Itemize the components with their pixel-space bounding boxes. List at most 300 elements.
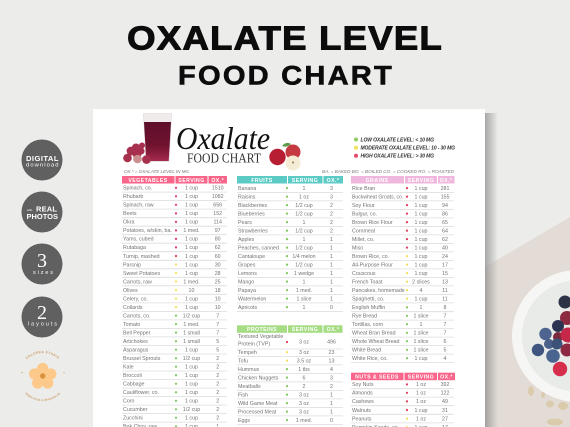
vegetables rows: 2 xyxy=(216,356,219,362)
logo: flower studio: COLOREA STUDIO xyxy=(26,350,60,359)
grains rows: 1 xyxy=(420,305,423,311)
photo: oatmeal bowl with berries xyxy=(512,270,570,426)
vegetables rows: 97 xyxy=(215,228,221,234)
nuts rows: 1 oz xyxy=(416,382,426,388)
vegetables header xyxy=(122,176,227,184)
grains rows: Couscous xyxy=(352,271,376,277)
nuts rows: 392 xyxy=(441,382,449,388)
fruits rows: 2 xyxy=(330,220,333,226)
vegetables rows: 1 small xyxy=(183,339,200,345)
grains rows: 1 slice xyxy=(413,331,429,337)
fruits rows: Blackberries xyxy=(238,203,267,209)
fruits rows: 1/2 cup xyxy=(295,245,313,251)
vegetables rows: Cabbage xyxy=(123,382,145,388)
vegetables rows: 1082 xyxy=(212,194,224,200)
vegetables rows: Rutabaga xyxy=(123,245,146,251)
vegetables rows: 1510 xyxy=(212,186,224,192)
badge: 2 layouts: 2 xyxy=(37,302,47,324)
nuts rows: Soy Nuts xyxy=(352,382,374,388)
proteins rows: Chicken Nuggets xyxy=(238,375,279,381)
vegetables rows: Asparagus xyxy=(123,348,149,354)
grains rows: 1 cup xyxy=(415,356,428,362)
grains rows: 65 xyxy=(442,220,448,226)
grains rows: Whole Wheat Bread xyxy=(352,339,399,345)
nuts rows: 1 oz xyxy=(416,391,426,397)
fruits rows: Apricots xyxy=(238,305,257,311)
grains rows: English Muffin xyxy=(352,305,385,311)
nuts rows: 1 oz xyxy=(416,399,426,405)
proteins rows: Fish xyxy=(238,392,248,398)
panel: vegetables xyxy=(122,176,227,427)
vegetables rows: 60 xyxy=(215,254,221,260)
vegetables rows: 1 cup xyxy=(185,211,198,217)
vegetables rows: 10 xyxy=(215,296,221,302)
fruits rows: 1 xyxy=(330,279,333,285)
vegetables rows: 7 xyxy=(216,322,219,328)
vegetables rows: Yams, cubed xyxy=(123,237,154,243)
vegetables rows: 2 xyxy=(216,416,219,422)
proteins rows: 1 xyxy=(330,409,333,415)
grains rows: 64 xyxy=(442,228,448,234)
vegetables rows: 2 xyxy=(216,373,219,379)
proteins rows: Hummus xyxy=(238,367,260,373)
grains rows: 7 xyxy=(444,331,447,337)
heading: Oxalate: Oxalate xyxy=(176,120,270,156)
fruits header: OX.* xyxy=(327,178,340,184)
vegetables rows: Collards xyxy=(123,305,143,311)
panel: fruits xyxy=(237,176,343,311)
grains rows: Cornmeal xyxy=(352,228,375,234)
vegetables rows: Sweet Potatoes xyxy=(123,271,160,277)
grains rows: Rye Bread xyxy=(352,314,377,320)
fruits rows: 3 xyxy=(330,186,333,192)
grains rows: 1 cup xyxy=(415,237,428,243)
nuts rows: 31 xyxy=(442,408,448,414)
grains rows: 5 xyxy=(444,348,447,354)
vegetables header: SERVING xyxy=(178,178,205,184)
vegetables rows: Potatoes, w/skin, ba. xyxy=(123,228,172,234)
fruits rows: Mango xyxy=(238,279,254,285)
fruits rows: Banana xyxy=(238,186,256,192)
proteins header: OX.* xyxy=(327,327,340,333)
fruits rows: 1 xyxy=(303,186,306,192)
beige tabletop xyxy=(485,217,570,427)
proteins rows: 3 oz xyxy=(299,392,309,398)
proteins rows: 496 xyxy=(327,340,336,346)
grains rows: Rice Bran xyxy=(352,186,375,192)
vegetables rows: Tomato xyxy=(123,322,140,328)
vegetables rows: 2 xyxy=(216,364,219,370)
vegetables rows: 1 cup xyxy=(185,382,198,388)
vegetables rows: 1 cup xyxy=(185,373,198,379)
vegetables rows: 1 cup xyxy=(185,245,198,251)
vegetables rows: Carrots, co. xyxy=(123,313,150,319)
grains rows: 1 cup xyxy=(415,296,428,302)
badge: real photos: with xyxy=(27,208,33,212)
grains rows: Millet, co. xyxy=(352,237,374,243)
grains rows: Soy Flour xyxy=(352,203,375,209)
grains rows: White Rice, co. xyxy=(352,356,388,362)
panel: nuts and seeds xyxy=(351,373,455,427)
grains rows: 1 cup xyxy=(415,220,428,226)
vegetables rows: Spinach, co. xyxy=(123,186,152,192)
nuts header: NUTS & SEEDS xyxy=(355,374,399,380)
fruits rows xyxy=(237,186,343,311)
vegetables rows: 62 xyxy=(215,245,221,251)
badge: digital download xyxy=(22,140,62,180)
vegetables rows: Cauliflower, co. xyxy=(123,390,159,396)
badge: 3 sizes xyxy=(22,244,62,284)
fruits rows: Lemons xyxy=(238,271,257,277)
vegetables rows: 1 med. xyxy=(183,322,200,328)
badge: real photos xyxy=(22,192,62,232)
grains rows: 7 xyxy=(444,314,447,320)
vegetables rows: Turnip, mashed xyxy=(123,254,160,260)
fruits header: FRUITS xyxy=(251,178,273,184)
grains rows: Spaghetti, co. xyxy=(352,296,384,302)
proteins rows: Textured Vegetable xyxy=(238,334,283,340)
proteins rows: Protein (TVP) xyxy=(238,342,270,348)
vegetables rows: Broccoli xyxy=(123,373,142,379)
vegetables rows: 1 cup xyxy=(185,237,198,243)
vegetables rows: 18 xyxy=(215,288,221,294)
grains rows: 1 cup xyxy=(415,262,428,268)
vegetables rows xyxy=(122,186,227,427)
grains rows: 8 xyxy=(444,305,447,311)
icon: red grapes xyxy=(123,142,151,164)
vegetables header: OX.* xyxy=(211,178,225,184)
fruits rows: 1 med. xyxy=(296,288,312,294)
grains rows: Pancakes, homemade xyxy=(352,288,405,294)
nuts rows: 27 xyxy=(442,416,448,422)
nuts rows: 49 xyxy=(442,399,448,405)
proteins rows: 4 xyxy=(330,367,333,373)
nuts rows: 1 oz xyxy=(416,416,426,422)
proteins rows: 2 xyxy=(303,384,306,390)
proteins rows: 6 xyxy=(303,375,306,381)
vegetables rows: Rhubarb xyxy=(123,194,143,200)
nuts rows: Peanuts xyxy=(352,416,372,422)
vegetables rows: 10 xyxy=(215,305,221,311)
proteins rows: 3 oz xyxy=(299,401,309,407)
badge: real photos: PHOTOS xyxy=(26,212,58,221)
badge: 2 layouts: layouts xyxy=(28,322,57,328)
fruits rows: 1 oz xyxy=(299,194,309,200)
grains rows xyxy=(351,186,454,362)
vegetables rows: 152 xyxy=(213,211,222,217)
grains rows: Brown Rice, co. xyxy=(352,254,389,260)
grains rows: 1 xyxy=(420,322,423,328)
fruits rows: 1/4 melon xyxy=(292,254,316,260)
vegetables rows: Cucumber xyxy=(123,407,148,413)
vegetables rows: Corn xyxy=(123,399,135,405)
fruits rows: 1 xyxy=(330,254,333,260)
fruits rows: Papaya xyxy=(238,288,256,294)
proteins rows: 3 oz xyxy=(299,409,309,415)
grains rows: 1 cup xyxy=(415,194,428,200)
vegetables rows: Spinach, raw xyxy=(123,203,154,209)
grains rows: 1 cup xyxy=(415,186,428,192)
proteins rows xyxy=(237,334,343,424)
fruits rows: 1 xyxy=(330,296,333,302)
proteins rows: 3 oz xyxy=(299,340,309,346)
fruits rows: 2 xyxy=(330,211,333,217)
proteins rows: Processed Meat xyxy=(238,409,277,415)
vegetables rows: Parsnip xyxy=(123,262,141,268)
fruits rows: Cantaloupe xyxy=(238,254,265,260)
nuts rows: Cashews xyxy=(352,399,374,405)
nuts header xyxy=(351,373,455,380)
grains rows: Bulgur, co. xyxy=(352,211,377,217)
title xyxy=(127,20,443,90)
grains rows: 1 cup xyxy=(415,228,428,234)
grains rows: 1 slice xyxy=(413,348,429,354)
fruits rows: 1 slice xyxy=(296,296,312,302)
fruits rows: Watermelon xyxy=(238,296,266,302)
note: cooking abbreviations: BA. = BAKED BO. = BOILED CO. = COOKED RO. = ROASTED xyxy=(322,169,455,174)
grains header: SERVING xyxy=(408,178,434,184)
vegetables rows: 1/2 cup xyxy=(183,356,200,362)
vegetables rows: 1 cup xyxy=(185,254,198,260)
fruits rows: 1 xyxy=(303,237,306,243)
nuts header: OX.* xyxy=(440,374,453,380)
vegetables rows: Artichokes xyxy=(123,339,148,345)
vegetables rows: 114 xyxy=(213,220,222,226)
vegetables rows: 2 xyxy=(216,390,219,396)
grains rows: 7 xyxy=(444,322,447,328)
fruits rows: 1 xyxy=(330,262,333,268)
grains rows: French Toast xyxy=(352,279,383,285)
grains rows: 6 xyxy=(444,339,447,345)
legend: MODERATE OXALATE LEVEL: 10 - 30 MG xyxy=(360,146,455,152)
vegetables rows: 30 xyxy=(215,262,221,268)
proteins rows: 2 xyxy=(330,384,333,390)
proteins rows: Eggs xyxy=(238,418,250,424)
proteins rows: Wild Game Meat xyxy=(238,401,278,407)
proteins rows: 13 xyxy=(329,358,334,364)
grains rows: 2 slices xyxy=(412,279,430,285)
badge: 2 layouts xyxy=(22,296,62,338)
legend: LOW OXALATE LEVEL: < 10 MG xyxy=(360,138,434,144)
fruits rows: Grapes xyxy=(238,262,256,268)
fruits rows: 1/2 cup xyxy=(295,211,313,217)
fruits rows: 1/2 cup xyxy=(295,262,313,268)
fruits rows: 1 xyxy=(330,271,333,277)
subtitle: FOOD CHART xyxy=(178,60,394,90)
grains rows: 1 slice xyxy=(413,339,429,345)
fruits rows: Strawberries xyxy=(238,228,268,234)
logo: flower studio xyxy=(21,350,65,401)
vegetables rows: 1 cup xyxy=(185,399,198,405)
grains rows: 94 xyxy=(442,203,448,209)
legend: HIGH OXALATE LEVEL: > 30 MG xyxy=(360,154,434,160)
vegetables rows: 2 xyxy=(216,382,219,388)
proteins header xyxy=(237,325,342,333)
grains rows: Wheat Bran Bread xyxy=(352,331,396,337)
vegetables rows: 1 cup xyxy=(185,262,198,268)
proteins rows: 1 med. xyxy=(296,418,312,424)
vegetables rows: 7 xyxy=(216,330,219,336)
panel: chart sheet xyxy=(93,109,485,427)
grains rows: 24 xyxy=(442,254,448,260)
fruits rows: 3 xyxy=(330,194,333,200)
grains rows: Miso xyxy=(352,245,363,251)
proteins rows: Tempeh xyxy=(238,350,257,356)
grains rows: 4 xyxy=(444,356,447,362)
vegetables rows: 1 cup xyxy=(185,416,198,422)
fruits rows: 1 xyxy=(330,237,333,243)
fruits rows: 1 wedge xyxy=(294,271,314,277)
fruits header: SERVING xyxy=(292,178,318,184)
nuts rows: Walnuts xyxy=(352,408,371,414)
fruits rows: 0 xyxy=(330,305,333,311)
grains rows: 155 xyxy=(441,194,449,200)
legend xyxy=(354,138,455,160)
proteins header: SERVING xyxy=(292,327,318,333)
nuts rows xyxy=(351,382,454,427)
vegetables rows: 1 cup xyxy=(185,364,198,370)
vegetables rows: 1 med. xyxy=(183,279,200,285)
vegetables rows: 5 xyxy=(216,348,219,354)
grains rows: Buckwheat Groats, co. xyxy=(352,194,403,200)
vegetables rows: 1 med. xyxy=(183,228,200,234)
fruits rows: Peaches, canned xyxy=(238,245,279,251)
vegetables header: VEGETABLES xyxy=(128,178,168,184)
icon: apples xyxy=(269,143,300,170)
grains rows: 1 cup xyxy=(415,203,428,209)
vegetables rows: 2 xyxy=(216,407,219,413)
grains rows: 40 xyxy=(442,245,448,251)
note: ox abbreviation: OX.* = OXALATE LEVEL IN MG xyxy=(124,169,189,174)
grains rows: Tortillas, corn xyxy=(352,322,383,328)
nuts header: SERVING xyxy=(408,374,434,380)
proteins rows: 1 xyxy=(330,392,333,398)
grains header xyxy=(351,176,454,184)
proteins rows: 3 xyxy=(330,375,333,381)
grains rows: 17 xyxy=(442,262,448,268)
heading: food chart: FOOD CHART xyxy=(187,151,262,166)
proteins rows: Meatballs xyxy=(238,384,261,390)
panel: proteins xyxy=(237,325,343,424)
vegetables rows: 7 xyxy=(216,313,219,319)
icon: glass of juice xyxy=(144,114,172,162)
proteins rows: 3.5 oz xyxy=(297,358,312,364)
title: OXALATE LEVEL xyxy=(127,20,443,58)
grains rows: 62 xyxy=(442,237,448,243)
grains rows: 1 cup xyxy=(415,245,428,251)
fruits rows: 1 xyxy=(330,245,333,251)
vegetables rows: Olives xyxy=(123,288,138,294)
vegetables rows: 1 cup xyxy=(185,194,198,200)
vegetables rows: 10 xyxy=(189,288,194,294)
fruits rows: 2 xyxy=(330,228,333,234)
nuts rows: 122 xyxy=(441,391,449,397)
vegetables rows: 1/2 cup xyxy=(183,407,200,413)
grains rows: 1 cup xyxy=(415,211,428,217)
grains rows: 86 xyxy=(442,211,448,217)
badge: digital download: DIGITAL xyxy=(26,154,59,163)
fruits rows: Pears xyxy=(238,220,252,226)
grains rows: All-Purpose Flour xyxy=(352,262,393,268)
vegetables rows: Bell Pepper xyxy=(123,330,151,336)
badge: 3 sizes: sizes xyxy=(33,270,53,276)
fruits rows: 1 xyxy=(303,220,306,226)
badge: 3 sizes: 3 xyxy=(37,250,47,272)
grains rows: 1 slice xyxy=(413,314,429,320)
vegetables rows: Carrots, raw xyxy=(123,279,152,285)
vegetables rows: 1/2 cup xyxy=(183,313,200,319)
grains header: OX.* xyxy=(440,178,453,184)
vegetables rows: 1 cup xyxy=(185,296,198,302)
vegetables rows: 80 xyxy=(215,237,221,243)
grains rows: 11 xyxy=(442,296,448,302)
vegetables rows: Okra xyxy=(123,220,135,226)
grains rows: 1 cup xyxy=(415,254,428,260)
vegetables rows: 1 cup xyxy=(185,203,198,209)
proteins rows: 1 tbs xyxy=(298,367,310,373)
vegetables rows: 1 cup xyxy=(185,390,198,396)
proteins rows: 1 xyxy=(330,401,333,407)
vegetables rows: 2 xyxy=(216,399,219,405)
grains rows: 1 cup xyxy=(415,271,428,277)
vegetables rows: 1 cup xyxy=(185,186,198,192)
grains rows: 13 xyxy=(442,279,448,285)
vegetables rows: 1 cup xyxy=(185,271,198,277)
vegetables rows: Beets xyxy=(123,211,137,217)
fruits rows: 1 xyxy=(330,288,333,294)
nuts rows: Almonds xyxy=(352,391,373,397)
proteins header: PROTEINS xyxy=(247,327,277,333)
fruits header xyxy=(237,176,343,184)
grains rows: 15 xyxy=(442,271,448,277)
proteins rows: 3 oz xyxy=(299,350,309,356)
grains rows: 11 xyxy=(442,288,448,294)
fruits rows: Apples xyxy=(238,237,255,243)
grains rows: 4 xyxy=(420,288,423,294)
sheet shadow xyxy=(485,113,498,427)
fruits rows: Raisins xyxy=(238,194,256,200)
fruits rows: Blueberries xyxy=(238,211,265,217)
proteins rows: Tofu xyxy=(238,358,248,364)
proteins rows: 23 xyxy=(329,350,334,356)
grains rows: Brown Rice Flour xyxy=(352,220,393,226)
nuts rows: 1 cup xyxy=(415,408,428,414)
vegetables rows: 25 xyxy=(215,279,221,285)
fruits rows: 2 xyxy=(330,203,333,209)
vegetables rows: Celery, co. xyxy=(123,296,148,302)
vegetables rows: 1 small xyxy=(183,330,200,336)
grains rows: White Bread xyxy=(352,348,381,354)
badge: digital download: download xyxy=(26,162,58,168)
vegetables rows: 1 cup xyxy=(185,305,198,311)
badge: real photos: REAL xyxy=(36,204,57,213)
grains rows: 281 xyxy=(441,186,449,192)
fruits rows: 1/2 cup xyxy=(295,228,313,234)
logo: flower studio: TEMPLATES & PRINTABLES xyxy=(25,392,60,401)
vegetables rows: Brussel Sprouts xyxy=(123,356,161,362)
fruits rows: 1 xyxy=(303,279,306,285)
vegetables rows: 5 xyxy=(216,339,219,345)
vegetables rows: Zucchini xyxy=(123,416,143,422)
vegetables rows: 1 cup xyxy=(185,348,198,354)
grains header: GRAINS xyxy=(366,178,389,184)
vegetables rows: 656 xyxy=(213,203,222,209)
vegetables rows: 28 xyxy=(215,271,221,277)
proteins rows: 0 xyxy=(330,418,333,424)
fruits rows: 1 xyxy=(303,305,306,311)
panel: grains xyxy=(351,176,454,362)
fruits rows: 1/2 cup xyxy=(295,203,313,209)
